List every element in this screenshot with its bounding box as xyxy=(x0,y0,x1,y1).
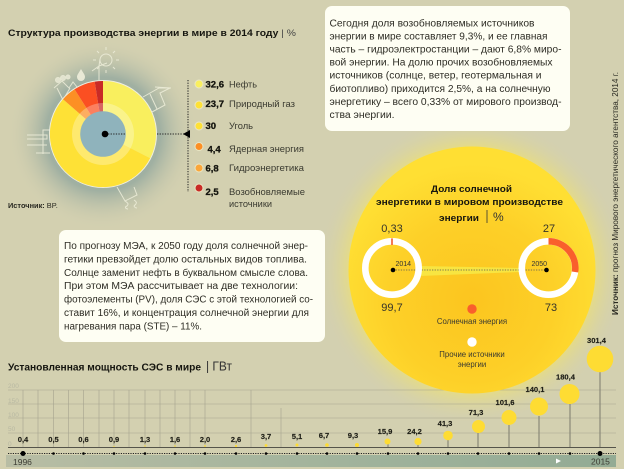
value labels: 9,3 xyxy=(348,431,358,440)
timeline dots xyxy=(8,451,616,456)
chart: installed solar capacity: | ГВт xyxy=(206,358,232,374)
value labels: 24,2 xyxy=(407,427,422,436)
text panel: renewables share: Сегодня доля возобновляемых источников xyxy=(330,18,534,30)
text panel: IEA forecast: гетики превзойдет долю остальных видов топлива. xyxy=(64,254,307,266)
heading: solar share xyxy=(376,184,563,224)
value labels: 301,4 xyxy=(587,336,607,345)
value labels: 0,6 xyxy=(78,435,89,444)
legend: other sources: Прочие источники xyxy=(439,350,505,359)
heading: solar share: Доля солнечной xyxy=(431,184,512,195)
value labels: 101,6 xyxy=(495,398,515,407)
panel: solar share sun xyxy=(348,146,596,394)
donut: nuclear xyxy=(63,89,103,134)
value labels: 6,7 xyxy=(319,431,329,440)
value labels: 41,3 xyxy=(438,419,452,428)
heading: solar share: % xyxy=(493,210,504,224)
axis labels: 0 xyxy=(8,441,12,448)
value labels: 3,7 xyxy=(261,432,271,441)
year labels: 1996 xyxy=(13,457,32,467)
legend: Возобновляемые xyxy=(229,187,305,198)
legend: Гидроэнергетика xyxy=(229,163,305,174)
value labels: 2,0 xyxy=(200,435,210,444)
donut: renewables xyxy=(95,81,103,134)
legend xyxy=(195,80,305,210)
value labels: 0,5 xyxy=(48,435,60,444)
text panel: IEA forecast: По прогнозу МЭА, к 2050 году доля солнечной энер- xyxy=(64,241,308,252)
axis labels: 50 xyxy=(8,426,16,433)
legend: 4,4 xyxy=(208,144,221,156)
axis labels: 150 xyxy=(8,398,19,405)
ring: 2014: 99,7 xyxy=(381,302,403,314)
heading: energy structure: Структура производства энергии в мире в 2014 году | % xyxy=(8,28,297,39)
value labels xyxy=(18,336,607,444)
bubbles xyxy=(113,346,613,447)
value labels: 0,4 xyxy=(18,435,29,444)
heading: solar share: энергии xyxy=(439,213,479,224)
ring: 2050: 73 xyxy=(545,302,557,314)
value labels: 2,6 xyxy=(231,435,241,444)
value labels: 140,1 xyxy=(525,385,545,394)
donut centre xyxy=(80,111,126,157)
year labels xyxy=(13,456,610,467)
ring: 2050 xyxy=(522,223,575,314)
icon: sun and wind turbine xyxy=(92,47,119,80)
legend: solar energy: Солнечная энергия xyxy=(437,317,507,326)
ring: 2050: 27 xyxy=(543,223,555,235)
chart grid xyxy=(8,390,616,447)
legend: источники xyxy=(229,199,272,210)
legend: Уголь xyxy=(229,121,253,132)
source: IEA vertical: Источник: прогноз Мирового энергетического агентства, 2014 г. xyxy=(611,72,620,315)
ring: 2014 xyxy=(365,223,419,314)
legend: 6,8 xyxy=(206,164,219,174)
text panel: renewables share: ства энергии. xyxy=(330,110,394,121)
text panel: IEA forecast: При этом МЭА рассчитывает на две технологии: xyxy=(64,281,298,292)
heading: solar share: энергетики в мировом производстве xyxy=(376,197,563,208)
donut glow xyxy=(8,39,198,229)
icon: factory xyxy=(54,75,77,100)
donut: oil xyxy=(103,81,156,158)
axis line xyxy=(8,446,616,448)
text panel: renewables share: часть – гидроэлектростанции – дают 6,8% миро- xyxy=(330,44,562,56)
value labels: 5,1 xyxy=(292,432,303,441)
text panel: IEA forecast: фотоэлементы (PV), доля СЭС с этой технологией со- xyxy=(64,294,313,306)
ring: 2014: 0,33 xyxy=(381,223,403,235)
icon: figure xyxy=(117,187,137,209)
timeline band xyxy=(6,455,616,467)
source: BP: Источник: BP. xyxy=(8,201,58,210)
text panel: renewables share: биотопливо) приходится 2,5%, а на солнечную xyxy=(330,84,550,95)
chart: energy structure 2014 xyxy=(8,28,305,229)
legend: 32,6 xyxy=(206,80,224,90)
text panel: renewables share: энергии в мире составляет 9,3%, и ее главная xyxy=(330,32,548,42)
value labels: 0,9 xyxy=(109,435,119,444)
legend: 23,7 xyxy=(206,99,224,110)
year labels: 2015 xyxy=(591,456,610,466)
legend: Нефть xyxy=(229,80,257,90)
value labels: 180,4 xyxy=(556,372,576,382)
ring: 2014: 2014 xyxy=(396,261,411,268)
axis labels xyxy=(8,383,19,448)
value labels: 71,3 xyxy=(469,408,483,417)
text panel: renewables share: энергетику – всего 0,33% от мирового производ- xyxy=(330,97,562,108)
text panel: renewables share xyxy=(325,6,570,131)
bubble stems xyxy=(388,372,600,447)
legend: Ядерная энергия xyxy=(229,144,304,155)
text panel: renewables share: вой энергии. На долю прочих возобновляемых xyxy=(330,58,553,68)
legend: solar energy xyxy=(437,304,507,326)
legend: other sources: энергии xyxy=(458,360,486,369)
centre dot xyxy=(102,131,108,137)
legend: 2,5 xyxy=(206,187,219,198)
text panel: renewables share: источников (солнце, ветер, геотермальная и xyxy=(330,70,542,82)
sun background glow xyxy=(317,115,624,425)
donut outer ring xyxy=(49,80,157,188)
legend: other sources xyxy=(439,337,505,369)
text panel: IEA forecast xyxy=(59,230,325,342)
icon: house xyxy=(143,87,171,112)
connector between years xyxy=(393,266,546,276)
text panel: IEA forecast: Солнце заменит нефть в буквальном смысле слова. xyxy=(64,268,308,279)
legend: Природный газ xyxy=(229,99,295,110)
icon: industrial building xyxy=(27,130,50,154)
axis labels: 200 xyxy=(8,383,19,390)
text panel: IEA forecast: ставит 16%, и концентрация солнечной энергии для xyxy=(64,308,309,319)
donut: gas and coal xyxy=(50,99,150,187)
text panel: IEA forecast: нагревания пара (STE) – 11%. xyxy=(64,322,202,332)
axis labels: 100 xyxy=(8,412,19,419)
icon: water drop xyxy=(77,69,85,81)
donut: hydro xyxy=(74,82,103,134)
legend pointer xyxy=(183,80,190,192)
donut inner light ring xyxy=(72,103,134,165)
value labels: 1,6 xyxy=(170,435,180,444)
chart: installed solar capacity xyxy=(6,336,616,467)
heading: installed capacity: Установленная мощность СЭС в мире xyxy=(8,362,201,374)
value labels: 1,3 xyxy=(140,435,150,444)
ring: 2050: 2050 xyxy=(532,261,547,268)
value labels: 15,9 xyxy=(378,427,392,436)
arrow xyxy=(556,458,561,464)
legend: 30 xyxy=(206,121,216,132)
